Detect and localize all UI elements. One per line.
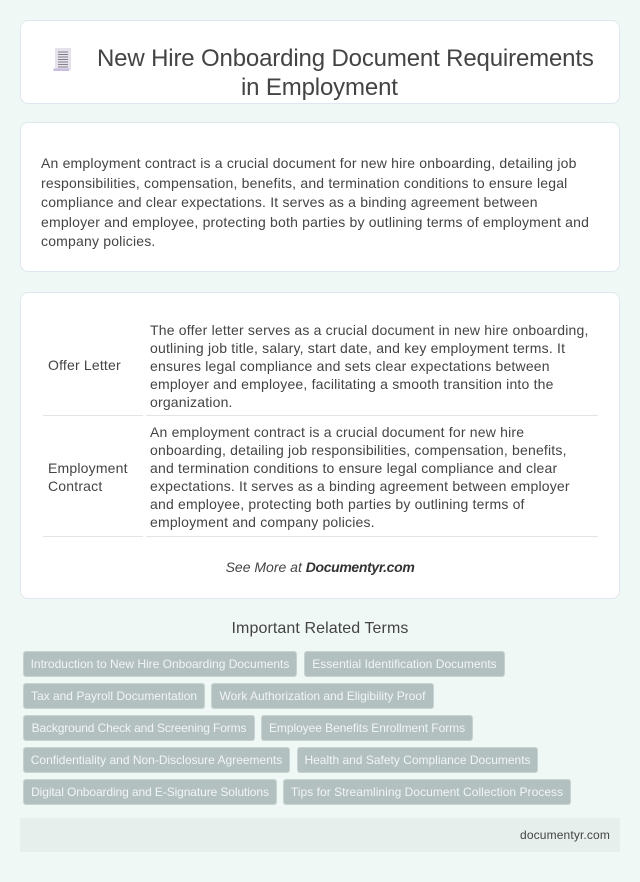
chip bbox=[297, 747, 538, 773]
chip: Introduction to New Hire Onboarding Documents bbox=[31, 657, 289, 671]
row text: offer letter: employer and employee, facilitating a smooth transition into the bbox=[150, 376, 554, 392]
row text: employment contract: An employment contract is a crucial document for new hire bbox=[150, 424, 524, 440]
panel: title card bbox=[20, 20, 620, 104]
intro text: compliance and clear expectations. It serves as a binding agreement between bbox=[41, 194, 538, 210]
intro text: company policies. bbox=[41, 233, 156, 249]
row text: employment contract: expectations. It serves as a binding agreement between employer bbox=[150, 478, 570, 494]
row label: employment contract: Employment bbox=[48, 460, 128, 476]
related terms chips bbox=[23, 651, 571, 805]
row text: offer letter: organization. bbox=[150, 394, 233, 410]
chip: Health and Safety Compliance Documents bbox=[304, 753, 531, 767]
icon: document bbox=[53, 48, 71, 71]
row text: offer letter: The offer letter serves as a crucial document in new hire onboarding, bbox=[150, 322, 589, 338]
heading: related terms: Important Related Terms bbox=[232, 620, 408, 637]
chip bbox=[23, 683, 205, 709]
footer bar bbox=[20, 818, 620, 852]
chip: Background Check and Screening Forms bbox=[32, 721, 246, 735]
panel: document table bbox=[20, 292, 620, 599]
chip bbox=[261, 715, 473, 741]
row text: offer letter bbox=[150, 322, 589, 410]
chip: Tips for Streamlining Document Collection Process bbox=[291, 785, 563, 799]
panel: introduction bbox=[20, 122, 620, 272]
chip: Essential Identification Documents bbox=[312, 657, 497, 671]
row text: employment contract bbox=[150, 424, 570, 530]
chip bbox=[304, 651, 505, 677]
row text: offer letter: ensures legal compliance and sets clear expectations between bbox=[150, 358, 550, 374]
chip: Employee Benefits Enrollment Forms bbox=[269, 721, 465, 735]
row label: employment contract: Contract bbox=[48, 478, 102, 494]
row text: employment contract: onboarding, detailing job responsibilities, compensation, benefits, bbox=[150, 442, 567, 458]
footer text: documentyr.com bbox=[520, 828, 610, 842]
chip bbox=[283, 779, 571, 805]
title bbox=[97, 45, 594, 101]
row text: offer letter: outlining job title, salary, start date, and key employment terms. It bbox=[150, 340, 565, 356]
chip: Work Authorization and Eligibility Proof bbox=[220, 689, 425, 703]
chip bbox=[211, 683, 434, 709]
title: in Employment bbox=[241, 74, 398, 101]
intro text bbox=[41, 155, 589, 249]
chip bbox=[23, 779, 277, 805]
row label: offer letter: Offer Letter bbox=[48, 357, 121, 373]
intro text: An employment contract is a crucial document for new hire onboarding, detailing job bbox=[41, 155, 577, 171]
see more link: See More at Documentyr.com bbox=[226, 559, 414, 575]
chip bbox=[23, 747, 290, 773]
row text: employment contract: and termination conditions to ensure legal compliance and clear bbox=[150, 460, 557, 476]
row label: employment contract bbox=[48, 460, 128, 494]
intro text: responsibilities, compensation, benefits, and termination conditions to ensure legal bbox=[41, 174, 567, 190]
chip bbox=[23, 651, 297, 677]
row text: employment contract: employment and company policies. bbox=[150, 514, 375, 530]
chip: Digital Onboarding and E-Signature Solutions bbox=[31, 785, 269, 799]
chip bbox=[23, 715, 255, 741]
chip: Tax and Payroll Documentation bbox=[31, 689, 197, 703]
chip: Confidentiality and Non-Disclosure Agreements bbox=[31, 753, 282, 767]
title: New Hire Onboarding Document Requirements bbox=[97, 45, 594, 72]
row text: employment contract: and employee, protecting both parties by outlining terms of bbox=[150, 496, 525, 512]
intro text: employer and employee, protecting both parties by outlining terms of employment and bbox=[41, 214, 589, 230]
